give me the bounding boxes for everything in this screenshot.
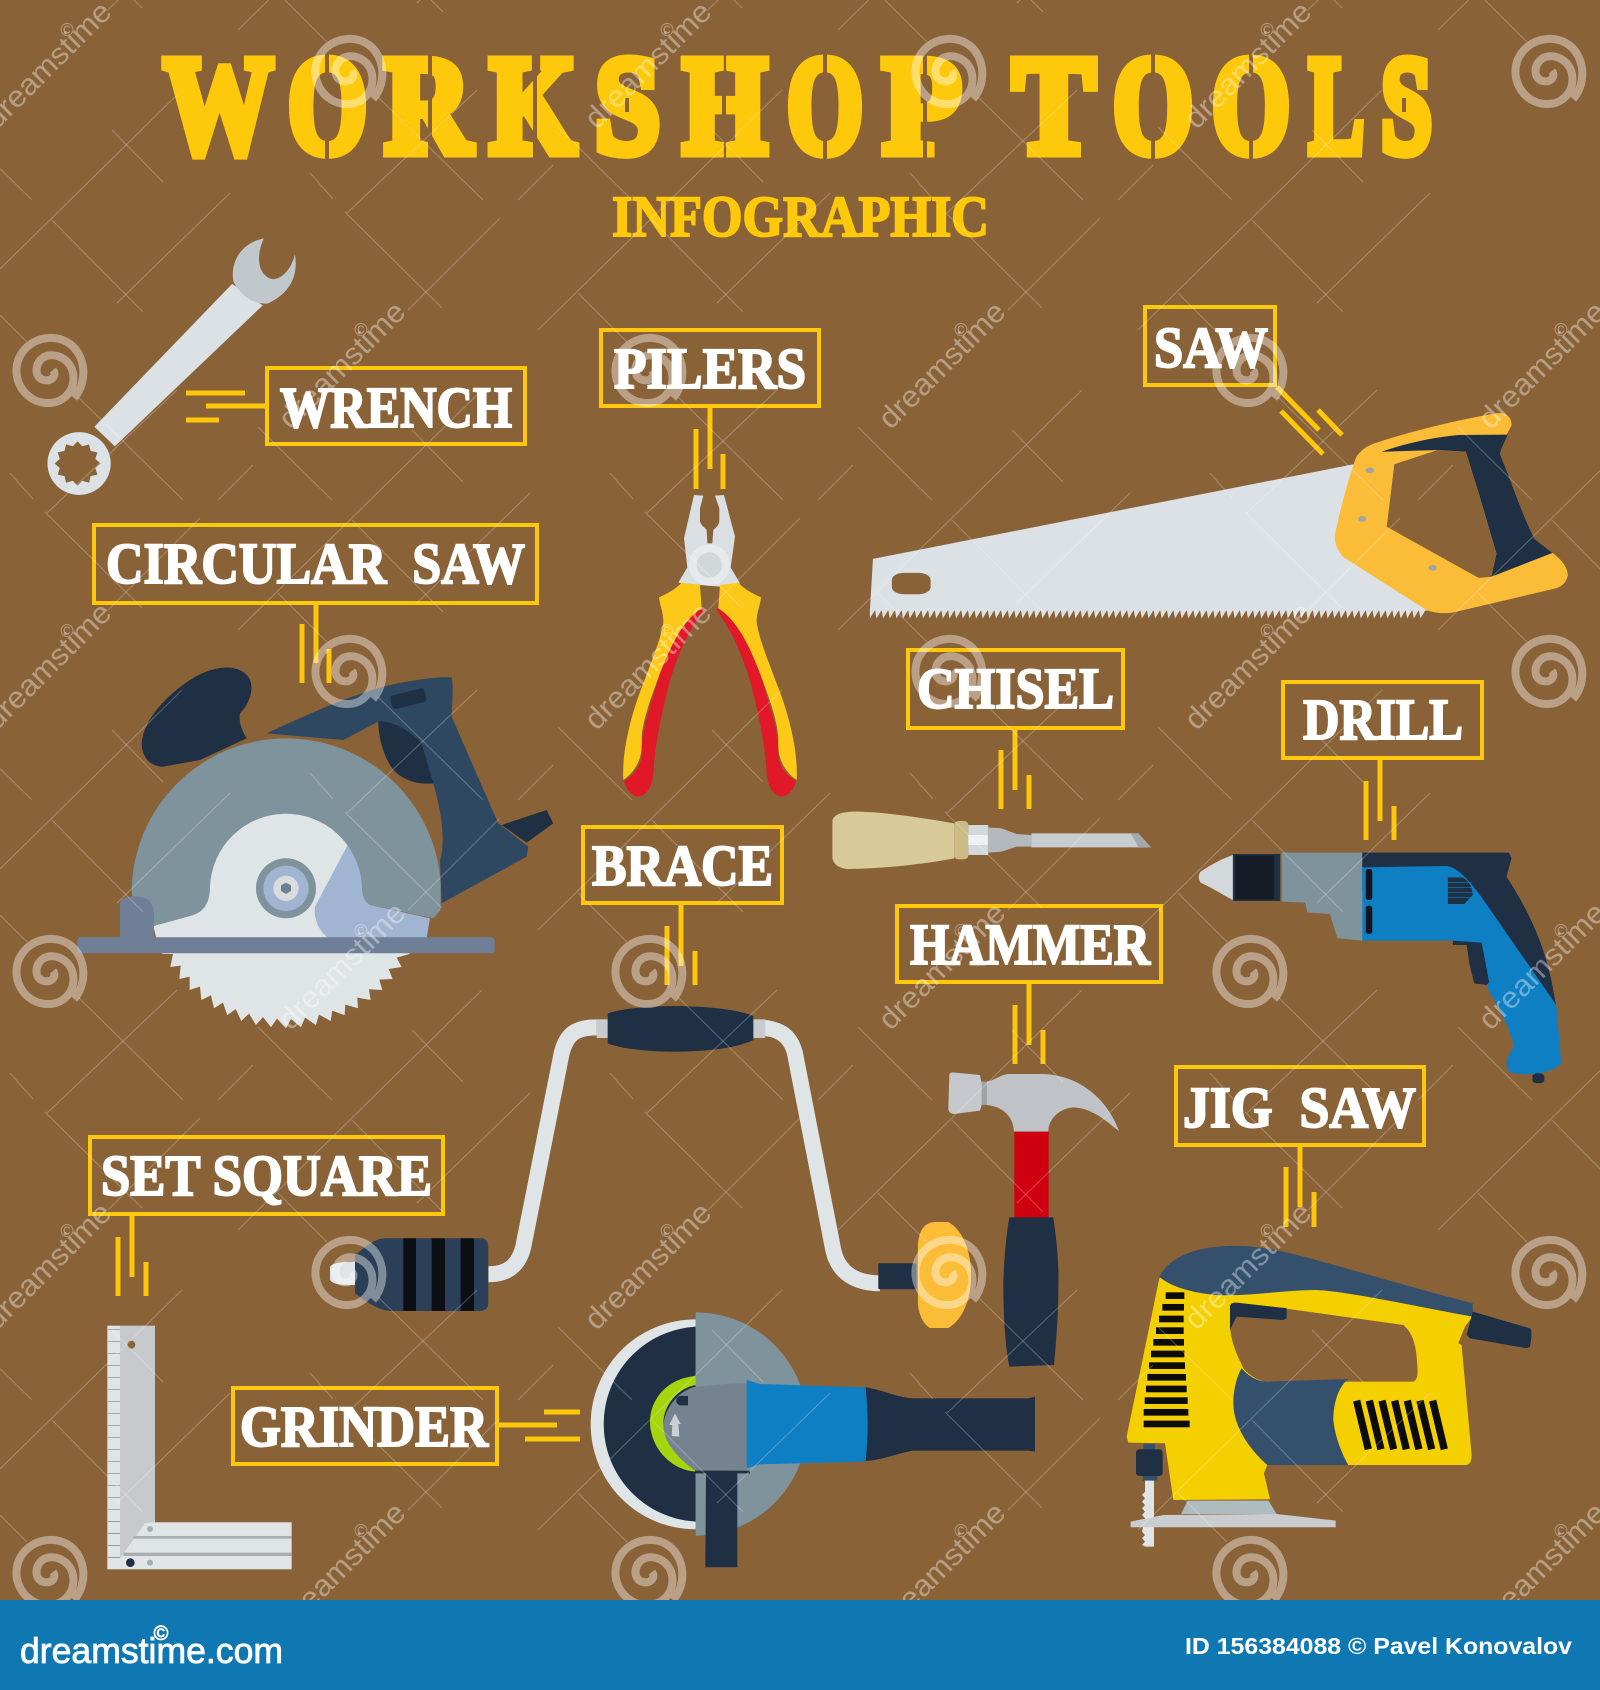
label: set square: SET SQUARE (101, 1143, 432, 1208)
chisel (832, 812, 1151, 869)
label: grinder: GRINDER (240, 1394, 489, 1459)
title: K (490, 29, 576, 183)
tool: chisel and drill (832, 812, 1561, 1083)
label: set square (90, 1137, 443, 1296)
label: pliers: PILERS (614, 336, 806, 401)
title: P (883, 29, 961, 183)
label: hammer (897, 906, 1161, 1064)
label: drill (1283, 682, 1482, 840)
subtitle: INFOGRAPHIC (612, 184, 989, 249)
label: circular saw (94, 525, 537, 683)
title: O (787, 29, 863, 183)
footer logo: © (154, 1623, 169, 1645)
label: chisel (908, 650, 1123, 809)
title: W (164, 29, 273, 183)
title: T (1013, 29, 1095, 183)
footer credit: ID 156384088 © Pavel Konovalov (1185, 1633, 1572, 1659)
tool: jig saw (1127, 1246, 1531, 1547)
tool: hammer (948, 1073, 1119, 1367)
drill (1199, 853, 1561, 1083)
title: R (385, 29, 472, 183)
label: grinder (233, 1388, 580, 1464)
label: saw: SAW (1154, 315, 1268, 380)
title: O (1113, 29, 1193, 183)
tool: set square (107, 1326, 292, 1569)
label: jig saw: JIG SAW (1183, 1075, 1416, 1140)
title: H (683, 29, 767, 183)
title: S (1381, 29, 1432, 183)
title: O (1212, 29, 1290, 183)
tool: circular saw (77, 667, 553, 1028)
tool: wrench (47, 239, 296, 495)
tool: angle grinder (591, 1312, 1035, 1567)
label: jig saw (1176, 1067, 1424, 1227)
label: drill: DRILL (1303, 687, 1463, 752)
label: circular saw: CIRCULAR SAW (106, 531, 525, 596)
title: O (288, 29, 367, 183)
label: brace: BRACE (592, 833, 773, 898)
tool: pliers (623, 495, 797, 797)
title (164, 29, 1432, 183)
title: S (595, 29, 660, 183)
footer logo: dreamstime.com (20, 1630, 283, 1671)
label: hammer: HAMMER (910, 912, 1151, 977)
title: L (1309, 29, 1364, 183)
label: brace (583, 827, 782, 985)
footer bar (0, 1600, 1600, 1690)
label: chisel: CHISEL (917, 656, 1114, 721)
label: saw (1145, 307, 1342, 454)
tool: hand saw (870, 413, 1568, 619)
label: wrench: WRENCH (280, 375, 512, 440)
label: wrench (186, 368, 525, 444)
label: pliers (601, 330, 819, 489)
tool: brace (330, 1006, 971, 1328)
